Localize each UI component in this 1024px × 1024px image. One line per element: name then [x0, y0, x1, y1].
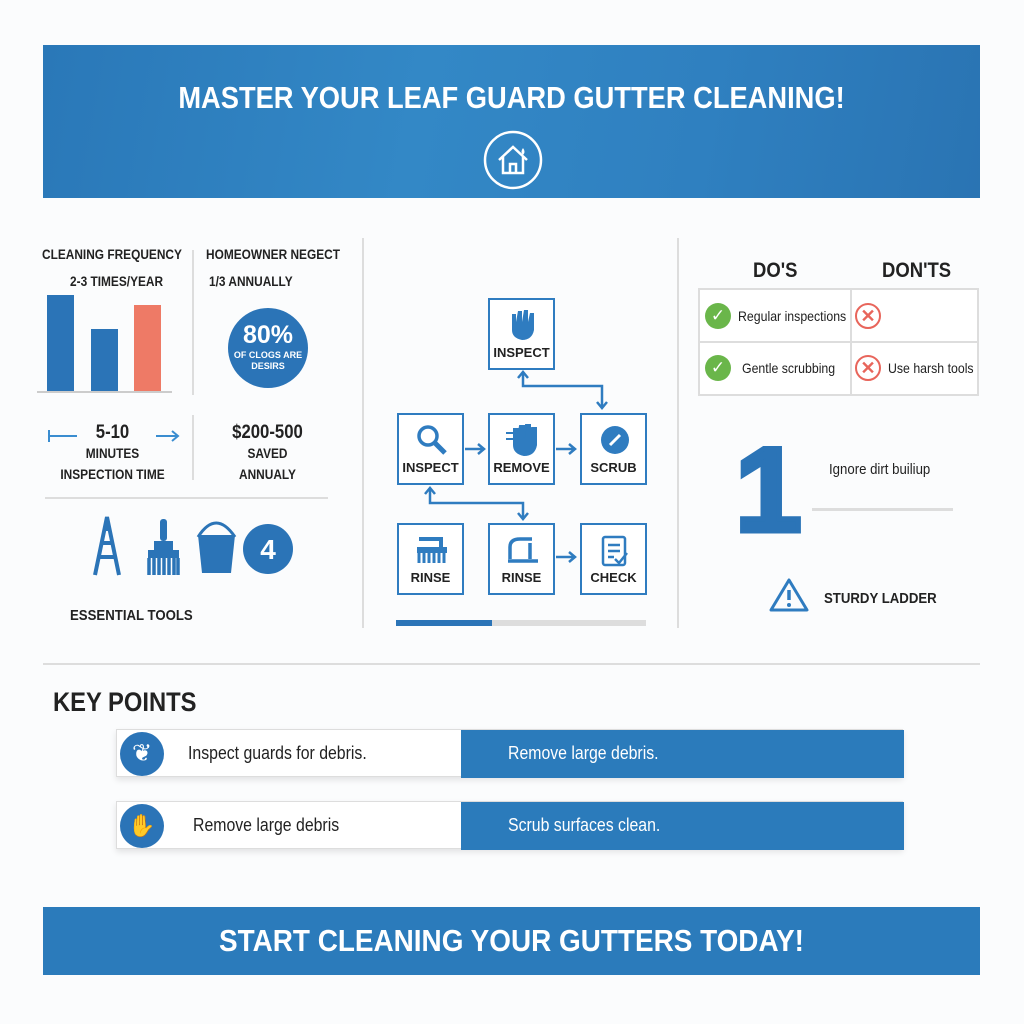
panel: do's and don'ts	[698, 259, 979, 612]
header banner	[43, 45, 980, 198]
step: inspect top	[488, 298, 555, 370]
panel: stats	[37, 247, 340, 624]
panel: stats: SAVED	[247, 446, 288, 461]
table	[698, 288, 979, 396]
panel: do's and don'ts: DON'TS	[882, 259, 951, 282]
step: inspect: INSPECT	[402, 460, 459, 475]
table: Use harsh tools	[888, 360, 974, 376]
homeowner neglect: HOMEOWNER NEGECT	[206, 247, 340, 262]
inspection time	[48, 430, 180, 442]
panel: process flowchart	[396, 298, 647, 626]
arrows	[424, 370, 608, 563]
footer banner: START CLEANING YOUR GUTTERS TODAY!	[219, 923, 804, 958]
step: rinse brush: RINSE	[411, 570, 450, 585]
title: MASTER YOUR LEAF GUARD GUTTER CLEANING!	[178, 80, 845, 115]
essential tools icons	[93, 516, 293, 576]
key point row 1	[116, 729, 903, 777]
panel: stats: INSPECTION TIME	[60, 467, 165, 482]
80% circle: DESIRS	[251, 361, 285, 371]
panel dividers	[362, 238, 364, 628]
key point row 2	[116, 801, 903, 849]
footer banner	[43, 907, 980, 975]
key point row 1: ❦	[132, 740, 152, 767]
panel: stats: ANNUALY	[239, 467, 296, 482]
panel: stats: 2-3 TIMES/YEAR	[70, 274, 163, 289]
step: rinse faucet: RINSE	[502, 570, 541, 585]
step: inspect top: INSPECT	[493, 345, 550, 360]
table: ✕	[860, 306, 876, 326]
step: check: CHECK	[590, 570, 637, 585]
icon: warning	[770, 578, 809, 612]
panel: do's and don'ts: STURDY LADDER	[824, 590, 937, 607]
step: remove	[488, 413, 555, 485]
panel: do's and don'ts: DO'S	[753, 259, 797, 282]
80% circle: OF CLOGS ARE	[234, 350, 302, 360]
panel: do's and don'ts: Ignore dirt builiup	[829, 461, 930, 478]
progress bar	[396, 620, 646, 626]
key point row 2: Remove large debris	[193, 815, 339, 835]
table: ✓	[711, 358, 725, 377]
key point row 1: Remove large debris.	[508, 743, 659, 763]
table: ✕	[860, 358, 876, 378]
panel: stats: 1/3 ANNUALLY	[209, 274, 293, 289]
step: scrub: SCRUB	[590, 460, 637, 475]
key point row 2: Scrub surfaces clean.	[508, 815, 660, 835]
table: ✓	[711, 306, 725, 325]
step: rinse brush	[397, 523, 464, 595]
bar chart	[37, 295, 172, 393]
key point row 1: Inspect guards for debris.	[188, 743, 367, 763]
step: remove: REMOVE	[493, 460, 550, 475]
step: rinse faucet	[488, 523, 555, 595]
essential tools icons: 4	[260, 534, 276, 565]
panel: stats: MINUTES	[86, 446, 139, 461]
step: inspect	[397, 413, 464, 485]
table: Gentle scrubbing	[742, 360, 835, 376]
panel: stats: ESSENTIAL TOOLS	[70, 607, 193, 624]
step: check	[580, 523, 647, 595]
cleaning frequency: CLEANING FREQUENCY	[42, 247, 182, 262]
table: Regular inspections	[738, 308, 846, 324]
key point row 2: ✋	[128, 813, 156, 838]
icon: house in circle	[484, 130, 542, 190]
80% circle: 80%	[243, 321, 293, 349]
step: scrub	[580, 413, 647, 485]
big number 1: 1	[735, 423, 802, 557]
savings: $200-500	[232, 422, 303, 443]
key points heading: KEY POINTS	[53, 687, 196, 717]
80% circle	[228, 308, 308, 388]
panel: stats: 5-10	[96, 422, 129, 443]
